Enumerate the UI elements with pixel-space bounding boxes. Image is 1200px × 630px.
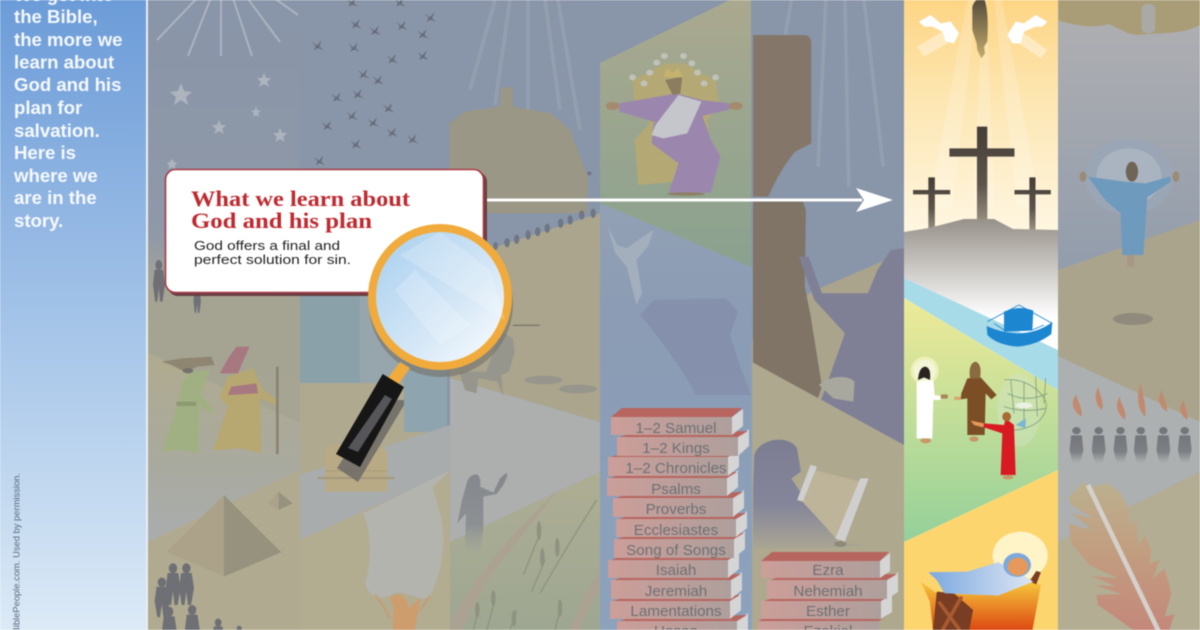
flames and people	[1070, 383, 1192, 463]
column 6: highlighted life of Christ	[904, 0, 1058, 630]
sash	[652, 95, 701, 138]
flock of quail	[312, 0, 436, 165]
stack of wisdom and prophet books	[607, 408, 749, 630]
open scroll	[797, 465, 869, 547]
right cross	[1014, 177, 1051, 230]
calling of the disciples and boat	[911, 305, 1052, 479]
sidebar intro text: God and his	[14, 74, 121, 95]
wheat field and praying woman	[450, 473, 599, 630]
distant silhouettes	[153, 260, 201, 313]
book titles	[793, 562, 863, 630]
callout heading	[191, 186, 411, 233]
enthroned king	[606, 53, 743, 196]
heavenly city	[1058, 0, 1200, 35]
water band	[904, 278, 1058, 390]
stars	[167, 73, 287, 169]
tan ground	[752, 252, 904, 445]
book titles	[625, 420, 727, 630]
light beams	[768, 0, 883, 187]
outstretched arms and robe	[619, 93, 730, 124]
pointer arrow	[482, 188, 893, 212]
callout body: God offers a final and	[194, 238, 340, 253]
glass shadow	[369, 231, 513, 377]
red head covering	[220, 347, 250, 373]
pyramids	[155, 492, 293, 630]
hands	[606, 102, 620, 110]
left cross	[913, 177, 950, 230]
hay	[921, 582, 1041, 630]
book titles: Isaiah	[656, 562, 696, 579]
feather	[1068, 483, 1175, 630]
callout heading: What we learn about	[191, 186, 411, 211]
Jesus in white	[920, 438, 931, 443]
manger wood	[933, 592, 973, 630]
column 4: king and books	[600, 0, 752, 630]
sidebar intro text: plan for	[14, 97, 82, 118]
history books stack	[758, 552, 898, 630]
magnifying glass	[336, 228, 513, 482]
central cross	[949, 127, 1014, 223]
boat	[987, 305, 1052, 347]
sidebar intro text: the Bible,	[14, 6, 98, 27]
book titles: Esther	[806, 603, 850, 620]
shadow	[1113, 313, 1153, 325]
rays of light	[470, 0, 580, 130]
light rays	[157, 0, 298, 56]
ground bands	[1058, 220, 1200, 440]
smoke	[363, 472, 448, 599]
neck	[388, 362, 410, 385]
sidebar intro text: salvation.	[14, 120, 100, 141]
book titles: Nehemiah	[793, 583, 863, 600]
praying person silhouette	[799, 248, 904, 447]
staff	[276, 367, 279, 454]
king head and crown	[665, 77, 682, 95]
book titles: 1–2 Kings	[642, 440, 710, 457]
halo	[993, 532, 1048, 580]
soldiers on the wall	[493, 171, 596, 250]
fishing net	[997, 373, 1041, 447]
book titles: 1–2 Chronicles	[625, 460, 727, 477]
rider and fallen soldiers	[459, 325, 597, 397]
sidebar intro text: are in the	[14, 187, 97, 208]
three crosses	[913, 127, 1051, 230]
Israelites walking with wood and staff	[161, 347, 280, 454]
disciple in brown	[969, 436, 979, 442]
large stone tablet silhouettes	[753, 35, 822, 408]
woman in green	[161, 370, 215, 453]
column 5: tablets, scribe and books	[752, 0, 904, 630]
book titles: 1–2 Samuel	[635, 420, 717, 437]
halo	[911, 357, 939, 385]
column 3: Jericho, battle and wheat field	[450, 0, 600, 630]
right angel	[1007, 15, 1047, 58]
blanket	[928, 562, 1033, 596]
lens	[372, 228, 508, 366]
handle	[336, 374, 404, 467]
city of Jericho	[450, 87, 587, 213]
callout body	[194, 238, 351, 267]
disciple in red	[984, 418, 1016, 475]
book titles: Jeremiah	[645, 583, 707, 600]
great fish	[640, 298, 751, 395]
callout body: perfect solution for sin.	[194, 252, 351, 267]
callout heading: God and his plan	[191, 208, 373, 233]
halo and risen Christ	[1080, 138, 1179, 267]
ark of the covenant	[318, 443, 394, 492]
flames	[390, 595, 420, 630]
book titles: Ecclesiastes	[634, 522, 719, 539]
baby in the manger	[921, 532, 1048, 630]
sidebar intro text: where we	[13, 165, 98, 186]
sun rays	[929, 0, 1040, 207]
baby head	[1003, 553, 1031, 577]
scribe silhouette	[753, 440, 864, 548]
callout box	[166, 170, 487, 296]
column 2: quail, water and ark	[300, 0, 450, 630]
column 1: creation and exodus	[148, 0, 300, 630]
throne	[633, 63, 719, 185]
left angel	[917, 15, 959, 57]
book titles: Proverbs	[646, 501, 707, 518]
raised hand	[819, 377, 854, 402]
man in yellow robe	[213, 368, 280, 453]
sidebar intro text: learn about	[14, 52, 114, 72]
book titles: Ezra	[812, 562, 844, 579]
israelite silhouettes	[155, 563, 244, 630]
sidebar intro text: the more we	[14, 29, 122, 50]
book titles: Song of Songs	[626, 542, 726, 559]
lens glare	[395, 232, 505, 345]
column 7: heaven and feather	[1058, 0, 1200, 630]
sidebar panel	[0, 0, 148, 630]
credit line: BiblePeople.com. Used by permission.	[10, 473, 22, 630]
Calvary hill	[904, 219, 1058, 350]
prophet figure	[608, 227, 654, 305]
book titles: Psalms	[651, 481, 701, 498]
firewood bundle	[161, 357, 215, 372]
book titles: Lamentations	[630, 603, 722, 620]
sidebar intro text: Here is	[14, 142, 76, 163]
ascending figure and angels	[917, 0, 1047, 58]
sidebar intro text: story.	[14, 210, 63, 231]
pillar of smoke and fire	[363, 472, 448, 630]
halo stars	[629, 53, 719, 86]
